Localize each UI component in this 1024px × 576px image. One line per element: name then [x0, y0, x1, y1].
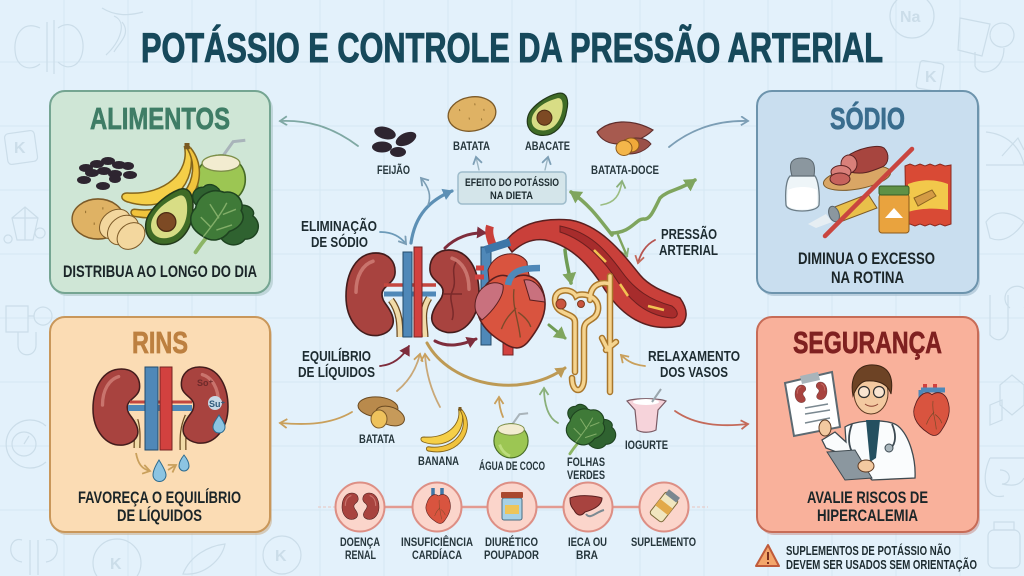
central box: efeito do potássio: [458, 172, 566, 204]
label: pressão arterial: ARTERIAL: [659, 242, 718, 259]
faint background medical icons: K: [110, 556, 122, 573]
caption: rins: [78, 488, 241, 525]
food: iogurte: [625, 389, 668, 452]
faint background medical icons: K: [275, 548, 287, 565]
connecting arrows: [280, 121, 748, 425]
illustration: artery: [505, 220, 686, 328]
food: banana: [418, 407, 467, 468]
icon: sausage on board: [822, 146, 892, 195]
label: relaxamento dos vasos: RELAXAMENTO: [648, 348, 740, 365]
heading: alimentos: ALIMENTOS: [90, 101, 230, 136]
warning text: SUPLEMENTOS DE POTÁSSIO NÃO: [786, 543, 951, 558]
risk: suplemento: SUPLEMENTO: [631, 535, 696, 549]
faint background medical icons: K: [925, 69, 937, 86]
illustration: heart: [475, 226, 545, 355]
icon: spinach: [191, 185, 258, 252]
risk: insuficiência cardíaca: INSUFICIÊNCIA: [401, 534, 473, 549]
label: eliminação de sódio: ELIMINAÇÃO: [301, 217, 377, 235]
heading: segurança: SEGURANÇA: [793, 325, 942, 360]
risk: insuficiência cardíaca: [401, 482, 473, 562]
central box: efeito do potássio: NA DIETA: [490, 190, 533, 202]
illustration: central kidneys: [346, 247, 479, 337]
caption: rins: DE LÍQUIDOS: [117, 506, 202, 525]
faint background medical icons: Na: [900, 9, 921, 26]
food: folhas verdes: [566, 404, 616, 482]
food: abacate: [525, 89, 570, 153]
central box: efeito do potássio: EFEITO DO POTÁSSIO: [465, 176, 559, 189]
food: folhas verdes: FOLHAS: [567, 455, 605, 469]
label: equilíbrio de líquidos: EQUILÍBRIO: [302, 348, 371, 365]
label: equilíbrio de líquidos: DE LÍQUIDOS: [298, 364, 375, 381]
icon: avocado: [146, 189, 193, 244]
icon: tube and spilled salt: [808, 194, 877, 228]
caption: segurança: HIPERCALEMIA: [817, 506, 918, 525]
caption: sódio: NA ROTINA: [831, 268, 904, 287]
food: feijão: [372, 124, 419, 177]
heading: sódio: SÓDIO: [830, 100, 905, 136]
labels around the anatomy: [298, 217, 740, 381]
food: batata: BATATA: [453, 139, 490, 153]
risk: diurético poupador: POUPADOR: [484, 548, 539, 562]
label: equilíbrio de líquidos: [298, 348, 375, 381]
food: abacate: ABACATE: [525, 139, 570, 153]
icon: crossed-out line: [825, 149, 912, 236]
risk: insuficiência cardíaca: CARDÍACA: [412, 547, 462, 562]
risk: ieca ou bra: BRA: [576, 548, 598, 562]
risk: diurético poupador: DIURÉTICO: [485, 534, 538, 549]
food: batata: [445, 93, 499, 153]
icon: chip bag: [905, 164, 951, 226]
warning note: [756, 543, 977, 572]
risk: ieca ou bra: [564, 482, 612, 562]
food: água de coco: [479, 413, 545, 473]
icon: bananas: [122, 143, 199, 218]
label: eliminação de sódio: [301, 217, 377, 251]
food: feijão: FEIJÃO: [377, 162, 410, 177]
panel: sódio: [757, 91, 980, 296]
food: banana: BANANA: [418, 454, 459, 468]
risk: doença renal: DOENÇA: [340, 535, 380, 549]
icon: heart: [914, 384, 949, 436]
risk: doença renal: [336, 482, 384, 562]
label: eliminação de sódio: DE SÓDIO: [311, 233, 368, 251]
icon: doctor: [819, 365, 915, 480]
icon: clipboard: [785, 372, 840, 436]
icon: salt shaker: [786, 158, 819, 211]
illustration: nephron: [555, 276, 616, 392]
food: batata-doce: BATATA-DOCE: [591, 163, 659, 177]
icon: black beans: [77, 157, 137, 190]
panel: segurança: [757, 317, 980, 535]
caption: alimentos: DISTRIBUA AO LONGO DO DIA: [63, 262, 257, 281]
warning text: [786, 543, 977, 572]
label: pressão arterial: PRESSÃO: [661, 225, 717, 243]
risk: diurético poupador: [484, 482, 539, 562]
caption: segurança: [807, 488, 928, 525]
icon: coconut: [197, 140, 245, 204]
caption: segurança: AVALIE RISCOS DE: [807, 488, 928, 507]
food: folhas verdes: VERDES: [567, 468, 605, 482]
label: relaxamento dos vasos: [648, 348, 740, 381]
panel: alimentos: [50, 91, 273, 296]
food: batata inferior: BATATA: [359, 432, 395, 446]
food: água de coco: ÁGUA DE COCO: [479, 458, 545, 473]
icon: Su bubble: Su⁺: [209, 399, 226, 409]
food: batata inferior: [357, 395, 407, 446]
label: relaxamento dos vasos: DOS VASOS: [660, 364, 728, 381]
icon: jar: [879, 186, 909, 233]
food: iogurte: IOGURTE: [625, 438, 668, 452]
caption: rins: FAVOREÇA O EQUILÍBRIO: [78, 488, 241, 507]
caption: sódio: DIMINUA O EXCESSO: [798, 249, 935, 268]
heading: rins: RINS: [132, 325, 188, 360]
caption: sódio: [798, 249, 935, 287]
faint background medical icons: K: [14, 140, 26, 157]
risk: ieca ou bra: IECA OU: [568, 535, 607, 549]
icon: warning triangle: [756, 545, 779, 566]
icon: arrows and water drops: [136, 453, 189, 482]
label: pressão arterial: [659, 225, 718, 259]
icon: kidneys and vessels: [93, 367, 228, 450]
icon: kidney drop: [213, 415, 225, 433]
risk: doença renal: RENAL: [345, 548, 376, 562]
food: batata-doce: [591, 122, 659, 177]
central anatomy: [346, 220, 686, 392]
icon: potato with slices: [72, 199, 150, 255]
risk: suplemento: [631, 482, 696, 549]
risk row: [318, 482, 708, 562]
label: So ion: So⁺: [197, 378, 214, 388]
panel: rins: [50, 317, 272, 535]
